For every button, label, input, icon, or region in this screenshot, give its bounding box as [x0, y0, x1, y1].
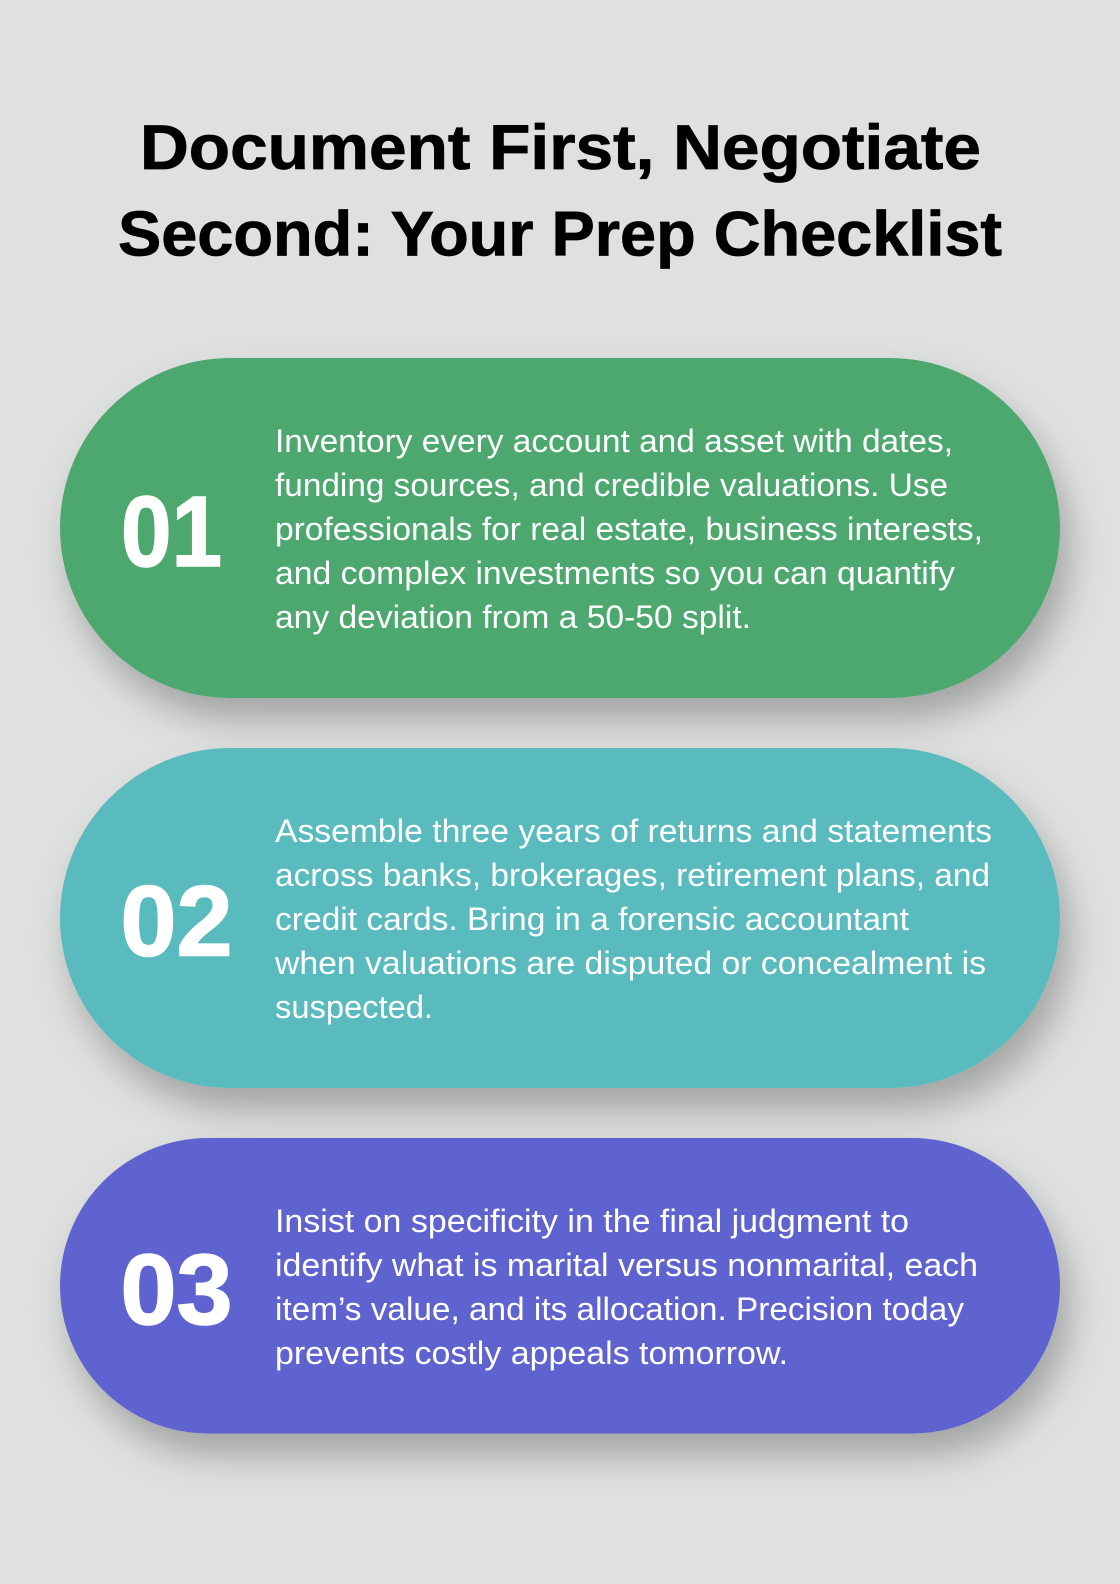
pill background: indigo: [60, 1138, 1060, 1434]
panel: step 03: [60, 1138, 1060, 1434]
text: step 02 description: [274, 813, 992, 1025]
text: step 03 description: Insist on specificity in the final judgment to: [275, 1203, 909, 1239]
text: step 01 description: [275, 423, 983, 635]
text: step 03 description: prevents costly appeals tomorrow.: [275, 1335, 788, 1371]
title: Document First, Negotiate: [140, 113, 981, 183]
text: step 01 description: funding sources, and credible valuations. Use: [275, 467, 948, 503]
text: step 01 description: Inventory every account and asset with dates,: [275, 423, 953, 459]
text: step 03 description: item’s value, and its allocation. Precision today: [275, 1291, 964, 1327]
text: step 02 description: credit cards. Bring in a forensic accountant: [275, 901, 909, 937]
text: step 01 description: any deviation from a 50-50 split.: [275, 599, 751, 635]
text: step 02 description: when valuations are disputed or concealment is: [274, 945, 986, 981]
text: step 03 description: identify what is marital versus nonmarital, each: [275, 1247, 978, 1283]
text: step 02 description: Assemble three years of returns and statements: [275, 813, 992, 849]
text: step 02 description: across banks, brokerages, retirement plans, and: [275, 857, 990, 893]
number 02: 02: [120, 866, 232, 978]
pill background: green: [60, 358, 1060, 698]
text: step 03 description: [275, 1203, 978, 1371]
title: [118, 113, 1002, 270]
panel: step 01: [60, 358, 1060, 698]
number 03: 03: [120, 1234, 232, 1346]
panel: step 02: [60, 748, 1060, 1088]
title: Second: Your Prep Checklist: [118, 200, 1002, 270]
text: step 01 description: professionals for real estate, business interests,: [275, 511, 983, 547]
pill background: teal: [60, 748, 1060, 1088]
text: step 02 description: suspected.: [275, 989, 433, 1025]
number 01: 01: [121, 476, 222, 588]
text: step 01 description: and complex investments so you can quantify: [275, 555, 955, 591]
